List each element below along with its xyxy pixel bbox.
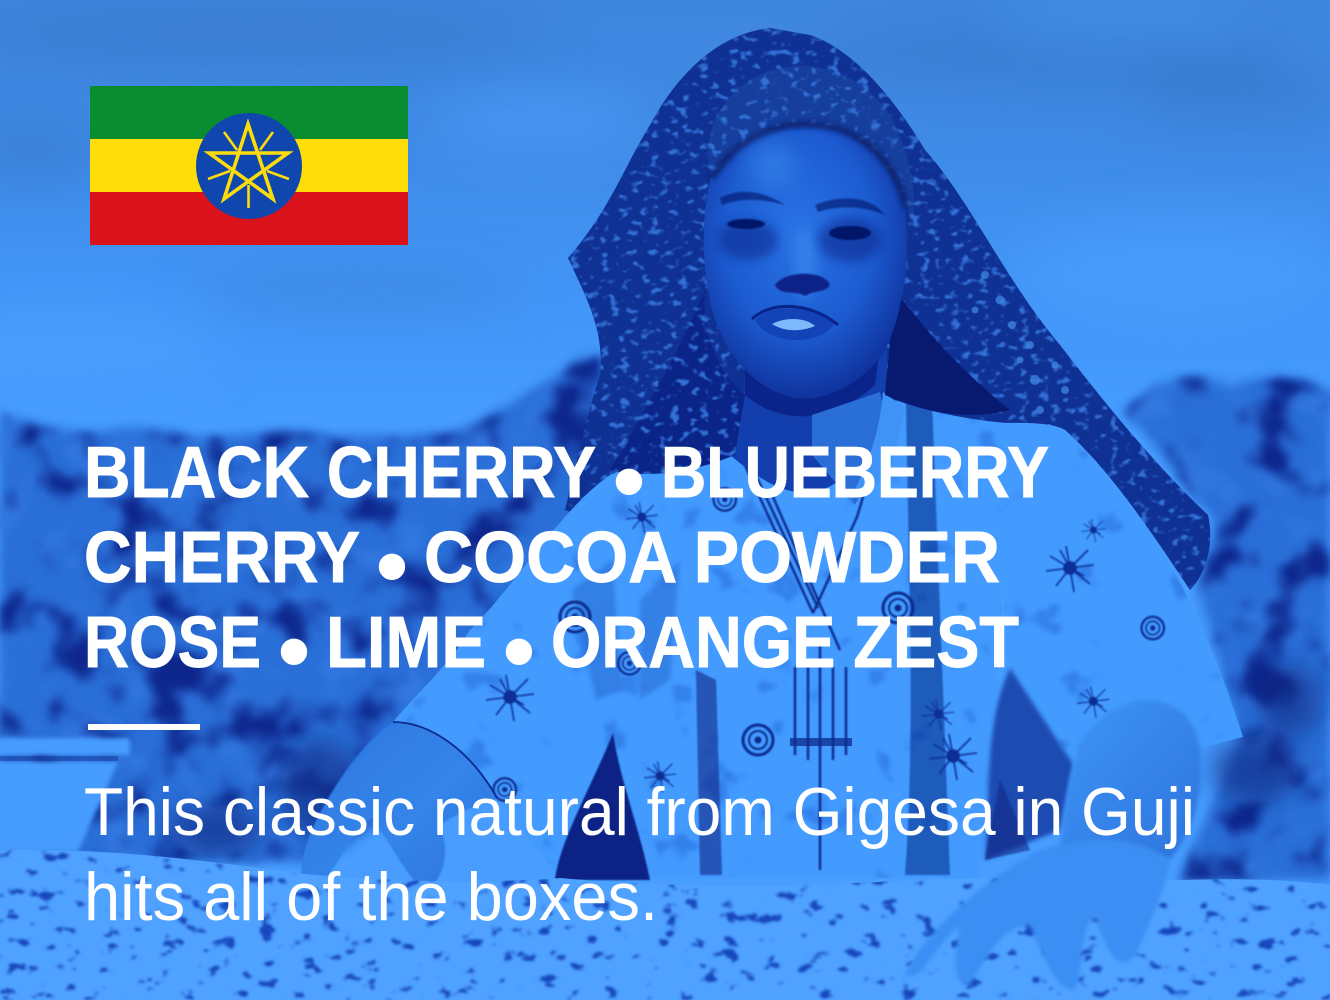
bright rooftop at far left: [0, 738, 130, 852]
right upper arm: [1060, 700, 1201, 860]
dress: [393, 395, 1050, 878]
background photo: coffee cherries on drying bed: [0, 840, 1330, 1000]
left collar fold: [572, 560, 622, 700]
heading: tasting notes: LIME: [326, 603, 486, 683]
flag of Ethiopia: [90, 86, 408, 245]
right hand resting on beans: [905, 840, 1170, 990]
scarf light dot pattern: [972, 271, 1069, 414]
heading: tasting notes: BLACK CHERRY: [84, 433, 596, 513]
scarf dark shadow beside the neck: [885, 290, 1010, 415]
heading: tasting notes: [84, 430, 1049, 702]
heading: tasting notes: CHERRY: [84, 518, 360, 598]
dress shadow folds: [555, 400, 1030, 880]
heading: tasting notes: •: [278, 600, 310, 702]
face: [704, 125, 907, 399]
background photo: woman: [301, 28, 1243, 900]
description text: [84, 774, 1195, 935]
background photo: trees on left and right: [0, 354, 1330, 880]
flag emblem: blue disc with star: [196, 113, 302, 219]
left arm and hand: [301, 722, 497, 900]
nose: [775, 274, 830, 296]
necklace strands: [738, 440, 880, 870]
heading: tasting notes: •: [376, 515, 408, 617]
forehead highlight: [748, 143, 796, 187]
heading: tasting notes: COCOA POWDER: [424, 518, 1000, 598]
head wrap band: [708, 66, 914, 225]
heading: tasting notes: BLUEBERRY: [661, 433, 1049, 513]
hair shadow along forehead: [712, 125, 906, 208]
description text: hits all of the boxes.: [84, 859, 658, 935]
description text: This classic natural from Gigesa in Guji: [84, 774, 1195, 850]
eye shadows: [718, 220, 778, 260]
scarf back drape: [565, 28, 1210, 590]
right sleeve: [1004, 424, 1243, 764]
eyes and brows: [720, 192, 885, 240]
floral sprigs: [486, 502, 1109, 792]
heading: tasting notes: ROSE: [84, 603, 261, 683]
heading: tasting notes: •: [503, 600, 535, 702]
heading: tasting notes: •: [613, 430, 645, 532]
mouth: [755, 308, 835, 340]
neck: [730, 340, 887, 493]
dress medallions: [494, 488, 1164, 801]
heading: tasting notes: ORANGE ZEST: [551, 603, 1019, 683]
divider rule: [88, 724, 200, 730]
right forearm gap: [985, 668, 1073, 860]
